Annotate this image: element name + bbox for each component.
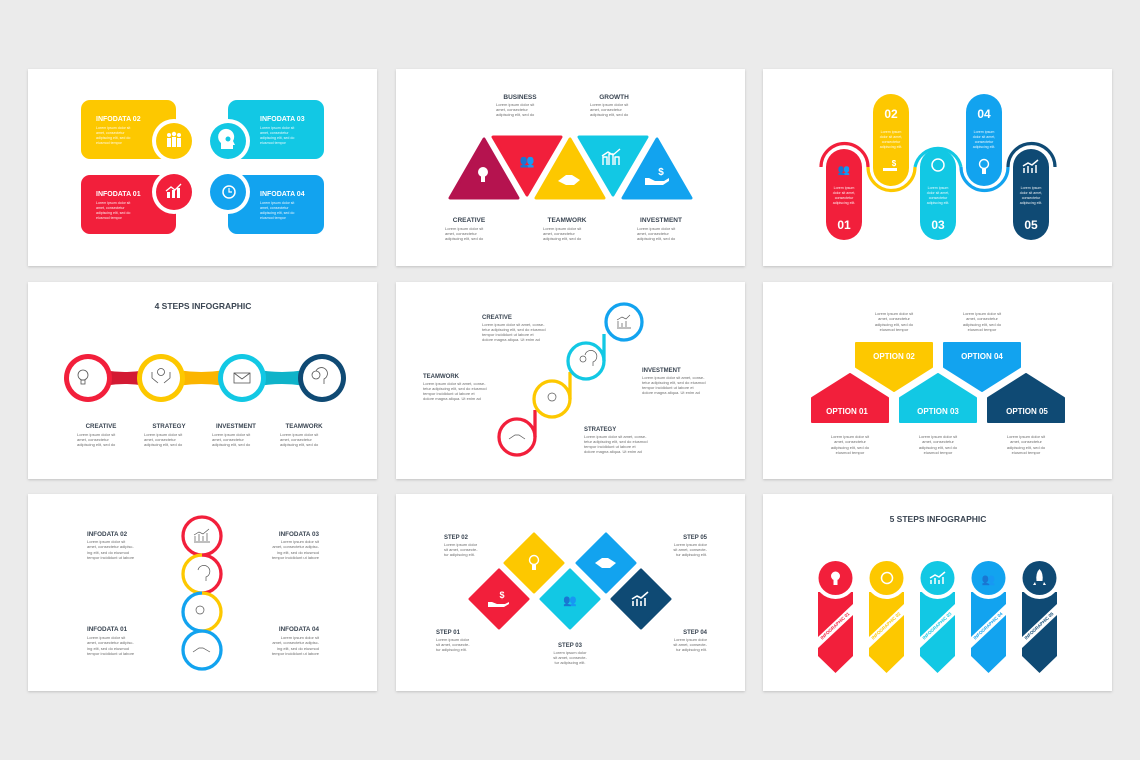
banner 04: INFOGRAPHIC 04 xyxy=(972,611,1004,641)
text: investment: Lorem ipsum dolor sit amet, conse- xyxy=(642,375,705,380)
title: 5 steps: 5 STEPS INFOGRAPHIC xyxy=(890,514,986,524)
labels: CREATIVE xyxy=(86,423,116,430)
box: infodata 03: eiusmod tempor xyxy=(260,141,287,145)
box: infodata 02: amet, consectetur xyxy=(96,131,125,135)
pill 03: consectetur xyxy=(929,196,948,200)
labels xyxy=(77,423,323,447)
text: teamwork: dolore magna aliqua. Ut enim ad xyxy=(423,396,481,401)
banner 03 xyxy=(916,557,958,673)
option labels: OPTION 05 xyxy=(1006,407,1048,416)
text: business: amet, consectetur xyxy=(496,107,528,112)
text: investment: adipiscing elit, sed do xyxy=(637,236,676,241)
text: step 05: sit amet, consecte- xyxy=(673,547,708,552)
descriptions: amet, consectetur xyxy=(878,316,911,321)
text: growth xyxy=(590,94,629,117)
text: step 02: Lorem ipsum dolor xyxy=(444,542,478,547)
text: step 04: sit amet, consecte- xyxy=(673,642,708,647)
box: infodata 01 xyxy=(81,175,176,234)
text: growth: amet, consectetur xyxy=(590,107,622,112)
triangle row: 👥 xyxy=(520,154,535,168)
text: creative: dolore magna aliqua. Ut enim ad xyxy=(482,337,540,342)
box: infodata 02: eiusmod tempor xyxy=(96,141,123,145)
text: step 03 xyxy=(553,643,587,665)
pill 05: consectetur xyxy=(1022,196,1041,200)
text: creative: tetur adipiscing elit, sed do eiusmod xyxy=(482,327,546,332)
descriptions: adipiscing elit, sed do xyxy=(1007,445,1046,450)
box: infodata 02 xyxy=(81,100,176,159)
connectors xyxy=(88,366,322,390)
labels: TEAMWORK xyxy=(285,423,323,430)
triangle row: $ xyxy=(658,167,664,178)
descriptions: Lorem ipsum dolor sit xyxy=(875,311,914,316)
text: step 03: STEP 03 xyxy=(558,643,583,649)
text: creative: amet, consectetur xyxy=(445,231,477,236)
text: infodata 03 xyxy=(272,531,320,560)
text: infodata 03: Lorem ipsum dolor sit xyxy=(281,539,320,544)
text: investment xyxy=(642,368,706,395)
pill 04: Lorem ipsum xyxy=(974,130,994,134)
banner 05: INFOGRAPHIC 05 xyxy=(1023,611,1055,641)
text: business: BUSINESS xyxy=(503,94,537,101)
text: step 03: tur adipiscing elit. xyxy=(555,660,585,665)
option labels: OPTION 01 xyxy=(826,407,868,416)
descriptions: amet, consectetur xyxy=(966,316,999,321)
text: infodata 01 xyxy=(87,626,135,656)
box: infodata 01: amet, consectetur xyxy=(96,206,125,210)
box: infodata 04: eiusmod tempor xyxy=(260,216,287,220)
text: growth: Lorem ipsum dolor sit xyxy=(590,102,629,107)
pill 02: dolor sit amet, xyxy=(880,135,902,139)
box: infodata 04: adipiscing elit, sed do xyxy=(260,211,294,215)
pill 01: adipiscing elit. xyxy=(833,201,855,205)
descriptions: Lorem ipsum dolor sit xyxy=(963,311,1002,316)
text: step 01: Lorem ipsum dolor xyxy=(436,637,470,642)
pill 02 xyxy=(873,94,909,186)
text: infodata 03: amet, consectetur adipisc- xyxy=(272,544,320,549)
pill 01 xyxy=(826,149,862,240)
pill 03: adipiscing elit. xyxy=(927,201,949,205)
descriptions: eiusmod tempor xyxy=(968,327,997,332)
text: infodata 02 xyxy=(87,531,135,560)
text: step 05: Lorem ipsum dolor xyxy=(674,542,708,547)
icon: chart xyxy=(152,170,196,214)
panel: slide 8 diamonds xyxy=(396,494,745,691)
text: creative: CREATIVE xyxy=(482,315,512,321)
pill 02: consectetur xyxy=(882,140,901,144)
panel: slide 6 options xyxy=(763,282,1112,479)
panel: slide 2 triangles xyxy=(396,69,745,266)
descriptions: adipiscing elit, sed do xyxy=(875,322,914,327)
labels: adipiscing elit, sed do xyxy=(77,442,116,447)
text: creative: adipiscing elit, sed do xyxy=(445,236,484,241)
text: investment: amet, consectetur xyxy=(637,231,669,236)
text: strategy: STRATEGY xyxy=(584,427,616,433)
text: infodata 03: ing elit, sed do eiusmod xyxy=(277,550,319,555)
text: teamwork: Lorem ipsum dolor sit xyxy=(543,226,582,231)
pill 02: 02 xyxy=(884,107,898,121)
labels: Lorem ipsum dolor sit xyxy=(212,432,251,437)
pill 01: 👥 xyxy=(838,165,850,176)
pill 01: dolor sit amet, xyxy=(833,191,855,195)
text: step 04: tur adipiscing elit. xyxy=(676,647,707,652)
text: creative: Lorem ipsum dolor sit xyxy=(445,226,484,231)
text: teamwork: tetur adipiscing elit, sed do eiusmod xyxy=(423,386,487,391)
diamonds xyxy=(470,534,670,628)
text: step 04: STEP 04 xyxy=(683,630,708,636)
descriptions: amet, consectetur xyxy=(922,439,955,444)
text: investment: tetur adipiscing elit, sed do eiusmod xyxy=(642,380,706,385)
descriptions: Lorem ipsum dolor sit xyxy=(831,434,870,439)
box: infodata 03: amet, consectetur xyxy=(260,131,289,135)
box: infodata 03: adipiscing elit, sed do xyxy=(260,136,294,140)
text: infodata 02: amet, consectetur adipisc- xyxy=(87,544,134,549)
banner 02 xyxy=(866,557,908,673)
text: step 02: sit amet, consecte- xyxy=(444,547,478,552)
banner 02: INFOGRAPHIC 02 xyxy=(870,611,902,641)
labels: adipiscing elit, sed do xyxy=(212,442,251,447)
icon: team xyxy=(152,119,196,163)
text: step 03: sit amet, consecte- xyxy=(553,655,587,660)
option shapes xyxy=(812,343,1064,422)
text: infodata 01: INFODATA 01 xyxy=(87,626,128,633)
text: teamwork: amet, consectetur xyxy=(543,231,575,236)
labels: adipiscing elit, sed do xyxy=(144,442,183,447)
box: infodata 04: amet, consectetur xyxy=(260,206,289,210)
text: teamwork xyxy=(423,374,487,401)
labels: Lorem ipsum dolor sit xyxy=(144,432,183,437)
descriptions: Lorem ipsum dolor sit xyxy=(919,434,958,439)
text: infodata 02: ing elit, sed do eiusmod xyxy=(87,550,129,555)
text: investment xyxy=(637,217,682,241)
pill 05: dolor sit amet, xyxy=(1020,191,1042,195)
text: teamwork: TEAMWORK xyxy=(423,374,460,380)
text: infodata 02: tempor incididunt ut labore xyxy=(87,555,135,560)
box: infodata 03 xyxy=(228,100,324,159)
text: business xyxy=(496,94,537,117)
labels: adipiscing elit, sed do xyxy=(280,442,319,447)
labels: amet, consectetur xyxy=(280,437,312,442)
text: strategy xyxy=(584,427,648,454)
text: teamwork: Lorem ipsum dolor sit amet, conse- xyxy=(423,381,486,386)
wave line xyxy=(821,144,1055,190)
box: infodata 04 xyxy=(228,175,324,234)
option labels: OPTION 03 xyxy=(917,407,959,416)
option labels: OPTION 04 xyxy=(961,352,1003,361)
text: infodata 01: amet, consectetur adipisc- xyxy=(87,640,134,645)
icon: head gear xyxy=(206,119,250,163)
text: infodata 04: tempor incididunt ut labore xyxy=(272,651,320,656)
panel: slide 1 infodata boxes xyxy=(28,69,377,266)
panel: slide 5 diagonal rings xyxy=(396,282,745,479)
ring chain xyxy=(183,517,221,669)
triangle row xyxy=(450,137,691,198)
box: infodata 02: Lorem ipsum dolor sit xyxy=(96,126,130,130)
labels: Lorem ipsum dolor sit xyxy=(77,432,116,437)
text: business: adipiscing elit, sed do xyxy=(496,112,535,117)
diamonds: 👥 xyxy=(563,595,577,607)
pill 03: Lorem ipsum xyxy=(928,186,948,190)
text: strategy: tetur adipiscing elit, sed do eiusmod xyxy=(584,439,648,444)
banner 05 xyxy=(1018,557,1060,673)
box: infodata 04: INFODATA 04 xyxy=(260,191,305,198)
text: teamwork: tempor incididunt ut labore et xyxy=(423,391,475,396)
panel: slide 3 wave pills xyxy=(763,69,1112,266)
pill 03 xyxy=(920,149,956,240)
text: creative xyxy=(482,315,546,342)
banner 04: 👥 xyxy=(982,574,996,586)
text: infodata 02: Lorem ipsum dolor sit xyxy=(87,539,126,544)
box: infodata 01: eiusmod tempor xyxy=(96,216,123,220)
pill 01: Lorem ipsum xyxy=(834,186,854,190)
pill 01: consectetur xyxy=(835,196,854,200)
text: business: Lorem ipsum dolor sit xyxy=(496,102,535,107)
pill 04: consectetur xyxy=(975,140,994,144)
text: strategy: dolore magna aliqua. Ut enim ad xyxy=(584,449,642,454)
text: infodata 01: tempor incididunt ut labore xyxy=(87,651,135,656)
pill 05 xyxy=(1013,149,1049,240)
text: infodata 04: ing elit, sed do eiusmod xyxy=(277,646,319,651)
title: 4 steps: 4 STEPS INFOGRAPHIC xyxy=(155,301,251,311)
text: investment: Lorem ipsum dolor sit xyxy=(637,226,676,231)
text: teamwork: adipiscing elit, sed do xyxy=(543,236,582,241)
descriptions: adipiscing elit, sed do xyxy=(831,445,870,450)
pill 04: adipiscing elit. xyxy=(973,145,995,149)
pill 02: Lorem ipsum xyxy=(881,130,901,134)
text: step 03: Lorem ipsum dolor xyxy=(553,650,587,655)
text: infodata 04: INFODATA 04 xyxy=(279,626,319,633)
pill 03: 03 xyxy=(931,218,945,232)
box: infodata 03: INFODATA 03 xyxy=(260,116,305,123)
text: infodata 01: ing elit, sed do eiusmod xyxy=(87,646,129,651)
rings xyxy=(499,304,642,455)
text: step 02: tur adipiscing elit. xyxy=(444,552,475,557)
banner 01 xyxy=(814,557,856,673)
option labels: OPTION 02 xyxy=(873,352,915,361)
banner 03: INFOGRAPHIC 03 xyxy=(921,611,953,641)
descriptions: eiusmod tempor xyxy=(1012,450,1041,455)
text: infodata 02: INFODATA 02 xyxy=(87,531,128,538)
text: investment: INVESTMENT xyxy=(642,368,681,374)
pill 03: dolor sit amet, xyxy=(927,191,949,195)
pill 02: adipiscing elit. xyxy=(880,145,902,149)
box: infodata 03: Lorem ipsum dolor sit xyxy=(260,126,294,130)
descriptions: adipiscing elit, sed do xyxy=(919,445,958,450)
panel: slide 7 vertical rings xyxy=(28,494,377,691)
text: infodata 01: Lorem ipsum dolor sit xyxy=(87,635,126,640)
panel: slide 4 four steps xyxy=(28,282,377,479)
text: infodata 04: Lorem ipsum dolor sit xyxy=(281,635,320,640)
text: creative: CREATIVE xyxy=(453,217,486,224)
pill 05: 05 xyxy=(1024,218,1038,232)
text: growth: adipiscing elit, sed do xyxy=(590,112,629,117)
panel: slide 9 five steps banners xyxy=(763,494,1112,691)
text: step 04 xyxy=(673,630,708,652)
text: creative: Lorem ipsum dolor sit amet, conse- xyxy=(482,322,545,327)
text: step 01: sit amet, consecte- xyxy=(436,642,470,647)
banner 04 xyxy=(968,557,1010,673)
banner 01: INFOGRAPHIC 01 xyxy=(819,611,851,641)
labels: amet, consectetur xyxy=(144,437,176,442)
box: infodata 04: Lorem ipsum dolor sit xyxy=(260,201,294,205)
labels: STRATEGY xyxy=(152,423,186,430)
text: creative: tempor incididunt ut labore et xyxy=(482,332,534,337)
descriptions: eiusmod tempor xyxy=(836,450,865,455)
pill 04: dolor sit amet, xyxy=(973,135,995,139)
descriptions: amet, consectetur xyxy=(834,439,867,444)
step circles xyxy=(64,354,346,402)
text: infodata 03: tempor incididunt ut labore xyxy=(272,555,320,560)
box: infodata 02: adipiscing elit, sed do xyxy=(96,136,130,140)
text: step 05 xyxy=(673,535,708,557)
pill 04: 04 xyxy=(977,107,991,121)
text: infodata 04: amet, consectetur adipisc- xyxy=(272,640,320,645)
descriptions: Lorem ipsum dolor sit xyxy=(1007,434,1046,439)
descriptions: eiusmod tempor xyxy=(924,450,953,455)
text: infodata 04 xyxy=(272,626,320,656)
box: infodata 01: Lorem ipsum dolor sit xyxy=(96,201,130,205)
descriptions: amet, consectetur xyxy=(1010,439,1043,444)
pill 04 xyxy=(966,94,1002,186)
text: creative xyxy=(445,217,486,241)
labels: amet, consectetur xyxy=(212,437,244,442)
text: teamwork xyxy=(543,217,587,241)
text: infodata 03: INFODATA 03 xyxy=(279,531,319,538)
text: growth: GROWTH xyxy=(599,94,629,101)
text: step 01 xyxy=(436,630,470,652)
descriptions: eiusmod tempor xyxy=(880,327,909,332)
pill 02: $ xyxy=(892,159,897,168)
text: step 05: tur adipiscing elit. xyxy=(676,552,707,557)
text: strategy: tempor incididunt ut labore et xyxy=(584,444,636,449)
text: strategy: Lorem ipsum dolor sit amet, conse- xyxy=(584,434,647,439)
labels: Lorem ipsum dolor sit xyxy=(280,432,319,437)
text: step 04: Lorem ipsum dolor xyxy=(674,637,708,642)
pill 05: adipiscing elit. xyxy=(1020,201,1042,205)
text: step 05: STEP 05 xyxy=(683,535,708,541)
pill 05: Lorem ipsum xyxy=(1021,186,1041,190)
descriptions: adipiscing elit, sed do xyxy=(963,322,1002,327)
box: infodata 01: adipiscing elit, sed do xyxy=(96,211,130,215)
labels: INVESTMENT xyxy=(216,423,256,430)
text: step 01: tur adipiscing elit. xyxy=(436,647,467,652)
labels: amet, consectetur xyxy=(77,437,109,442)
box: infodata 02: INFODATA 02 xyxy=(96,116,141,123)
text: step 02 xyxy=(444,535,478,557)
diamonds: $ xyxy=(499,590,505,600)
text: teamwork: TEAMWORK xyxy=(548,217,587,224)
text: investment: INVESTMENT xyxy=(640,217,682,224)
pill 01: 01 xyxy=(837,218,851,232)
icon: clock phone xyxy=(206,170,250,214)
option labels xyxy=(826,352,1048,416)
descriptions xyxy=(831,311,1046,455)
text: step 02: STEP 02 xyxy=(444,535,469,541)
text: investment: tempor incididunt ut labore et xyxy=(642,385,694,390)
box: infodata 01: INFODATA 01 xyxy=(96,191,141,198)
text: investment: dolore magna aliqua. Ut enim ad xyxy=(642,390,700,395)
text: step 01: STEP 01 xyxy=(436,630,461,636)
